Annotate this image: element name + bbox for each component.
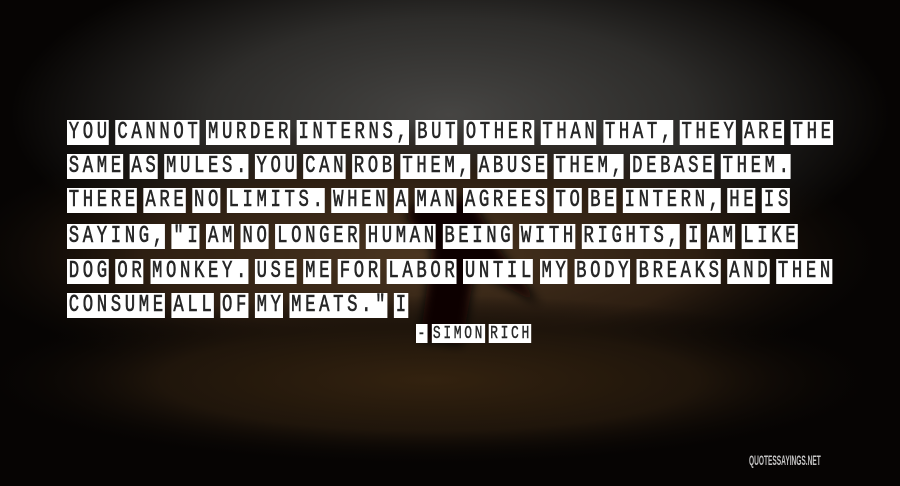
quote line 6: MY <box>257 292 285 319</box>
quote line 2: ROB <box>354 153 396 180</box>
quote line 6: I <box>396 292 410 319</box>
quote line 5: OR <box>117 258 145 285</box>
quote line 4: AM <box>709 223 737 250</box>
author attribution: RICH <box>490 324 532 344</box>
quote line 6: ALL <box>173 292 215 319</box>
quote line 5: MONKEY. <box>152 258 250 285</box>
quote line 3: A <box>396 187 410 214</box>
quote line 4: LIKE <box>743 223 799 250</box>
quote line 3: NO <box>194 187 222 214</box>
quote line 2: YOU <box>257 153 299 180</box>
quote line 4: "I <box>173 223 201 250</box>
quote text block <box>67 119 835 319</box>
quote line 5: THEN <box>778 258 834 285</box>
quote line 1: MURDER <box>208 119 292 146</box>
quote line 3: INTERN, <box>625 187 723 214</box>
quote line 2: THEM, <box>402 153 472 180</box>
quote line 2: CAN <box>305 153 347 180</box>
quote line 4: LONGER <box>277 223 361 250</box>
quote line 2: ABUSE <box>479 153 549 180</box>
quote line 5: LABOR <box>388 258 458 285</box>
quote line 2 <box>67 153 793 180</box>
quote line 1: ARE <box>744 119 786 146</box>
quote line 3: MAN <box>416 187 458 214</box>
quote line 5: USE <box>257 258 299 285</box>
author attribution <box>416 324 532 344</box>
quote line 6: CONSUME <box>69 292 167 319</box>
quote line 6: MEATS." <box>291 292 389 319</box>
quote line 5: BODY <box>576 258 632 285</box>
quote line 3: HE <box>729 187 757 214</box>
quote line 3: TO <box>555 187 583 214</box>
quote line 4: I <box>688 223 702 250</box>
author attribution: - <box>417 324 428 344</box>
quote line 1: YOU <box>69 119 111 146</box>
quote line 1: THE <box>793 119 835 146</box>
quote line 3: AGREES <box>465 187 549 214</box>
quote line 5: BREAKS <box>639 258 723 285</box>
quote line 5: UNTIL <box>465 258 535 285</box>
quote line 5: DOG <box>69 258 111 285</box>
quote line 2: THEM. <box>723 153 793 180</box>
quote line 1: OTHER <box>466 119 536 146</box>
quote line 5: ME <box>305 258 333 285</box>
quote line 2: SAME <box>69 153 125 180</box>
quote line 1: CANNOT <box>117 119 201 146</box>
quote line 1: THEY <box>681 119 738 146</box>
quote line 4: HUMAN <box>368 223 438 250</box>
quote line 2: THEM, <box>555 153 625 180</box>
quote line 1: THAN <box>542 119 598 146</box>
quote line 1: THAT, <box>605 119 675 146</box>
quote line 5: FOR <box>340 258 382 285</box>
quote line 1 <box>67 119 835 146</box>
quote line 2: AS <box>131 153 159 180</box>
quote line 2: DEBASE <box>632 153 716 180</box>
quote line 1: BUT <box>417 119 459 146</box>
quote line 3 <box>67 187 792 214</box>
quote line 3: ARE <box>145 187 187 214</box>
quote line 3: IS <box>764 187 792 214</box>
author attribution: SIMON <box>433 324 485 344</box>
quote line 5: MY <box>542 258 570 285</box>
quote line 5: AND <box>729 258 771 285</box>
quote line 4: RIGHTS, <box>583 223 681 250</box>
quote line 3: THERE <box>69 187 139 214</box>
quote line 2: MULES. <box>166 153 250 180</box>
quote line 6: OF <box>222 292 250 319</box>
quote line 3: WHEN <box>333 187 389 214</box>
watermark: QUOTESSAYINGS.NET <box>749 452 821 468</box>
quote line 4: AM <box>208 223 236 250</box>
quote line 4 <box>67 223 799 250</box>
quote line 3: LIMITS. <box>229 187 327 214</box>
quote line 1: INTERNS, <box>299 119 411 146</box>
quote line 3: BE <box>590 187 618 214</box>
quote line 4: WITH <box>521 223 577 250</box>
quote line 6 <box>67 292 410 319</box>
quote line 4: BEING <box>444 223 514 250</box>
quote line 4: SAYING, <box>69 223 167 250</box>
quote line 5 <box>67 258 834 285</box>
quote line 4: NO <box>243 223 271 250</box>
